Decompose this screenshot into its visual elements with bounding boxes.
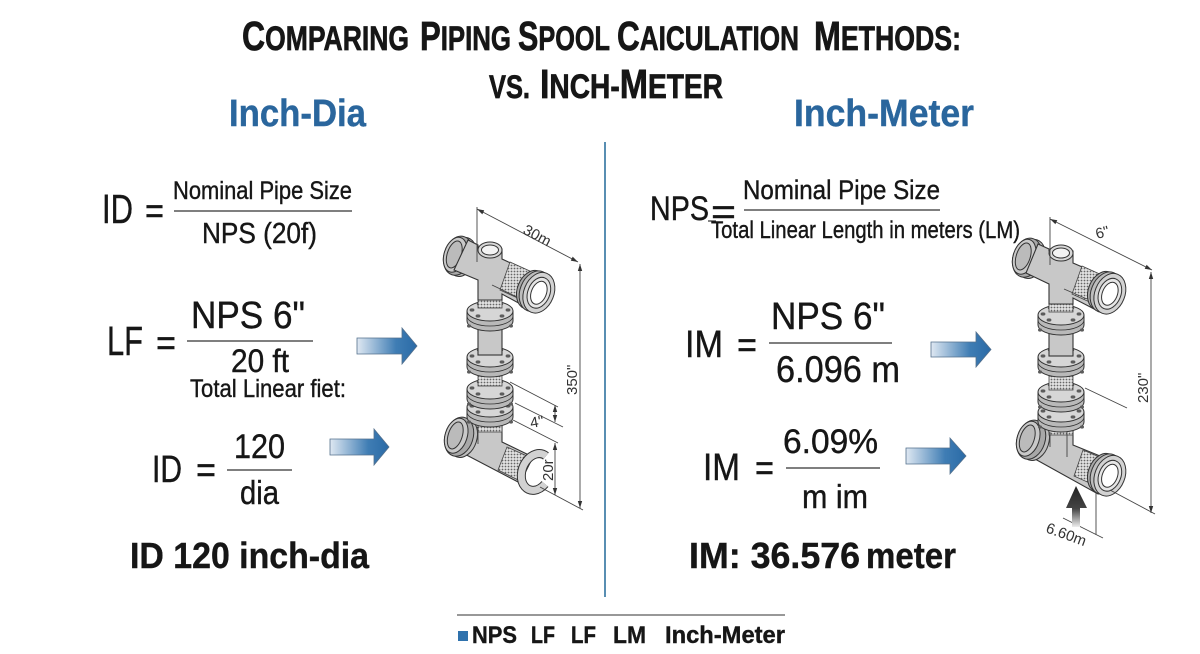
- legend labels: NPS: [472, 622, 517, 649]
- formula: ID equals nominal pipe size over NPS: ID: [102, 186, 133, 232]
- arrow: [931, 332, 991, 367]
- formula: LF equals NPS 6 over 20 ft: 20 ft: [231, 343, 289, 379]
- title line 1: METHODS:: [814, 13, 961, 59]
- legend labels: LF: [571, 622, 596, 649]
- formula: ID equals nominal pipe size over NPS: [102, 177, 352, 250]
- formula: LF equals NPS 6 over 20 ft: =: [156, 322, 176, 363]
- formula: LF equals NPS 6 over 20 ft: [107, 295, 313, 379]
- lower elbow: [440, 413, 546, 490]
- formula: IM equals 6.09 percent over m im: IM: [703, 447, 740, 489]
- formula: LF equals NPS 6 over 20 ft: NPS 6": [191, 295, 305, 337]
- formula: IM equals NPS 6 over 6.096 m: [685, 296, 900, 390]
- formula: ID equals nominal pipe size over NPS: Nominal Pipe Size: [173, 177, 352, 205]
- formula: ID equals 120 over dia: 120: [234, 428, 285, 466]
- formula: IM equals 6.09 percent over m im: m im: [802, 478, 868, 515]
- note: total linear feet: Total Linear fiet:: [190, 375, 346, 403]
- dimension label: 6 inches: 6": [1094, 223, 1111, 243]
- dimension label: 230 inches: 230": [1135, 373, 1152, 403]
- arrow: [330, 429, 389, 465]
- flanges and pipe stack: [1038, 302, 1084, 432]
- legend labels: LF: [531, 622, 555, 649]
- upper tee: [439, 232, 561, 318]
- arrow: up arrow: [1066, 486, 1087, 527]
- formula: NPS equals nominal pipe size over total linear length: Total Linear Length in meters (LM): [711, 217, 1020, 244]
- flanges and pipe stack: [467, 298, 513, 427]
- dimension lines: [1050, 217, 1155, 538]
- heading: Inch-Meter: Inch-Meter: [794, 93, 974, 135]
- legend labels: LM: [613, 622, 646, 649]
- formula: ID equals 120 over dia: [152, 428, 292, 511]
- footer legend: [457, 615, 785, 649]
- legend labels: Inch-Meter: [665, 622, 785, 649]
- dimension label: 4 inches: 4": [529, 413, 545, 432]
- legend labels: [472, 622, 785, 649]
- formula: IM equals NPS 6 over 6.096 m: IM: [685, 324, 723, 366]
- arrow: [906, 438, 966, 474]
- panel: Inch-Dia formulas: [102, 177, 417, 576]
- formula: ID equals 120 over dia: ID: [152, 449, 182, 491]
- center divider: [604, 142, 606, 597]
- formula: NPS equals nominal pipe size over total linear length: [650, 175, 1020, 244]
- dimension label: 6.60m: 6.60m: [1044, 520, 1089, 550]
- title: [242, 13, 961, 107]
- formula: ID equals 120 over dia: =: [196, 449, 216, 490]
- title line 1: COMPARING: [242, 13, 409, 59]
- result: IM 36.576 meter: IM: 36.576: [689, 535, 860, 576]
- title line 1: CAICULATION: [617, 13, 799, 59]
- formula: IM equals 6.09 percent over m im: [703, 423, 880, 515]
- diagram: right pipe spool: [1008, 217, 1155, 550]
- lower elbow: [1012, 416, 1132, 501]
- title line 1: SPOOL: [518, 13, 610, 59]
- dimension label: 30m: 30m: [520, 222, 554, 250]
- title line 2: VS.: [489, 69, 530, 105]
- formula: IM equals NPS 6 over 6.096 m: =: [737, 324, 757, 365]
- dimension label: 350 inches: 350": [564, 365, 581, 395]
- formula: IM equals 6.09 percent over m im: =: [755, 447, 774, 488]
- formula: NPS equals nominal pipe size over total linear length: =: [711, 191, 736, 232]
- heading: Inch-Dia: Inch-Dia: [229, 93, 367, 135]
- result: ID 120 inch-dia: ID 120 inch-dia: [130, 535, 370, 576]
- formula: LF equals NPS 6 over 20 ft: LF: [107, 318, 143, 364]
- result: IM 36.576 meter: [689, 535, 956, 576]
- dimension label: 20r: 20r: [540, 459, 557, 481]
- formula: NPS equals nominal pipe size over total linear length: Nominal Pipe Size: [743, 175, 940, 205]
- formula: ID equals nominal pipe size over NPS: NPS (20f): [202, 218, 317, 250]
- formula: IM equals 6.09 percent over m im: 6.09%: [783, 423, 878, 461]
- upper tee: [1008, 234, 1132, 319]
- panel: Inch-Meter formulas: [650, 175, 1020, 576]
- formula: IM equals NPS 6 over 6.096 m: 6.096 m: [776, 349, 900, 390]
- result: IM 36.576 meter: meter: [866, 535, 956, 576]
- formula: ID equals nominal pipe size over NPS: =: [145, 190, 164, 231]
- diagram: left pipe spool: [439, 207, 583, 510]
- title line 1: PIPING: [420, 13, 511, 59]
- title line 2: INCH-METER: [540, 61, 723, 107]
- formula: IM equals NPS 6 over 6.096 m: NPS 6": [771, 296, 885, 338]
- formula: ID equals 120 over dia: dia: [240, 474, 280, 511]
- legend marker: [458, 631, 468, 641]
- dimension lines: [477, 207, 583, 510]
- arrow: [357, 328, 417, 364]
- formula: NPS equals nominal pipe size over total linear length: NPS: [650, 190, 709, 228]
- title line 1: [242, 13, 961, 59]
